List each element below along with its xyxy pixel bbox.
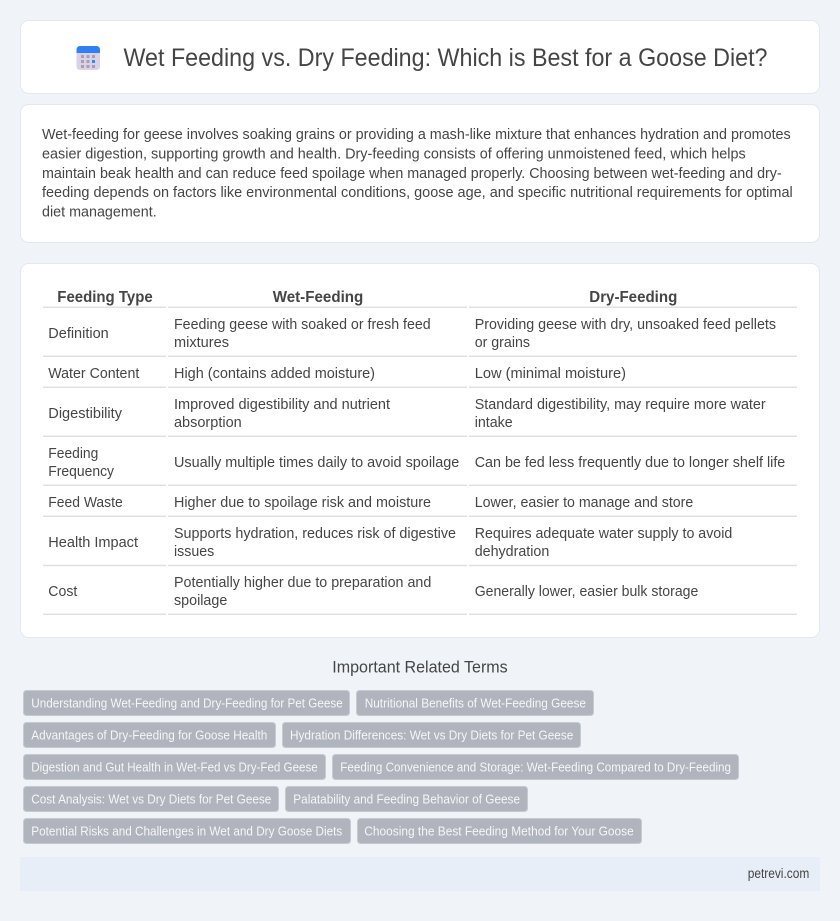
row: water content: High (contains added moisture) (174, 366, 375, 382)
row: cost: Potentially higher due to preparation and (174, 575, 431, 591)
row: definition: Providing geese with dry, unsoaked feed pellets (475, 317, 776, 333)
tag: Potential Risks and Challenges in Wet and Dry Goose Diets (31, 824, 342, 838)
tag (24, 722, 276, 748)
row: definition: Feeding geese with soaked or fresh feed (174, 317, 431, 333)
row: water content (43, 366, 797, 388)
row: definition: or grains (475, 335, 530, 351)
row: cost (43, 575, 797, 615)
header panel (20, 20, 820, 94)
tag: Choosing the Best Feeding Method for Your Goose (364, 824, 634, 838)
heading: important related terms: Important Related Terms (332, 659, 508, 677)
row: feeding frequency: Can be fed less frequently due to longer shelf life (475, 455, 785, 471)
related terms tags (24, 690, 738, 844)
row: health impact: issues (174, 544, 214, 560)
tag (24, 818, 350, 844)
table header row: Wet-Feeding (273, 289, 363, 306)
tag: Palatability and Feeding Behavior of Geese (293, 792, 520, 806)
tag: Advantages of Dry-Feeding for Goose Health (31, 728, 267, 742)
row: health impact: Requires adequate water supply to avoid (475, 526, 732, 542)
tag: Feeding Convenience and Storage: Wet-Feeding Compared to Dry-Feeding (340, 760, 731, 774)
row: definition: mixtures (174, 335, 229, 351)
row: cost: Cost (48, 584, 77, 600)
row: definition: Definition (48, 326, 109, 342)
row: digestibility: intake (475, 415, 513, 431)
tag (356, 690, 594, 716)
row: digestibility: absorption (174, 415, 242, 431)
tag: Cost Analysis: Wet vs Dry Diets for Pet Geese (31, 792, 271, 806)
row: digestibility: Standard digestibility, may require more water (475, 397, 766, 413)
intro paragraph: diet management. (42, 204, 157, 220)
row: feeding frequency: Feeding (48, 446, 98, 462)
tag (24, 786, 278, 812)
icon: calendar (76, 46, 100, 70)
row: feeding frequency: Usually multiple times daily to avoid spoilage (174, 455, 459, 471)
table header row: Dry-Feeding (589, 289, 677, 306)
tag (24, 754, 326, 780)
row: health impact: Health Impact (48, 535, 138, 551)
row: water content: Low (minimal moisture) (475, 366, 626, 382)
intro paragraph (42, 126, 793, 220)
row: feeding frequency (43, 446, 797, 486)
tag: Digestion and Gut Health in Wet-Fed vs Dry-Fed Geese (31, 760, 318, 774)
row: digestibility: Improved digestibility and nutrient (174, 397, 390, 413)
tag: Nutritional Benefits of Wet-Feeding Geese (365, 696, 586, 710)
title: Wet Feeding vs. Dry Feeding: Which is Best for a Goose Diet? (124, 45, 768, 72)
tag: Hydration Differences: Wet vs Dry Diets for Pet Geese (290, 728, 573, 742)
tag (286, 786, 528, 812)
footer (20, 857, 820, 891)
panel: introduction text (20, 104, 820, 242)
table header row (43, 289, 797, 308)
row: feed waste (43, 495, 797, 517)
tag: Understanding Wet-Feeding and Dry-Feeding for Pet Geese (31, 696, 343, 710)
row: cost: Generally lower, easier bulk storage (475, 584, 698, 600)
row: water content: Water Content (48, 366, 139, 382)
row: digestibility: Digestibility (48, 406, 123, 422)
row: health impact: Supports hydration, reduces risk of digestive (174, 526, 456, 542)
row: feed waste: Lower, easier to manage and store (475, 495, 693, 511)
table header row: Feeding Type (57, 289, 153, 306)
tag (24, 690, 350, 716)
panel: comparison table (20, 264, 820, 638)
row: feeding frequency: Frequency (48, 464, 115, 480)
intro paragraph: feeding depends on factors like environmental conditions, goose age, and specific nutritional requirements for optimal (42, 184, 793, 201)
row: cost: spoilage (174, 593, 227, 609)
intro paragraph: easier digestion, supporting growth and health. Dry-feeding consists of offering unmoistened feed, which helps (42, 146, 746, 162)
row: health impact (43, 526, 797, 566)
tag (282, 722, 580, 748)
intro paragraph: Wet-feeding for geese involves soaking grains or providing a mash-like mixture that enhances hydration and promotes (42, 126, 791, 143)
tag (358, 818, 642, 844)
row: digestibility (43, 397, 797, 437)
tag (332, 754, 738, 780)
row: feed waste: Feed Waste (48, 495, 123, 511)
footer site name: petrevi.com (748, 866, 809, 881)
row: definition (43, 317, 797, 357)
row: feed waste: Higher due to spoilage risk and moisture (174, 495, 431, 511)
row: health impact: dehydration (475, 544, 549, 560)
intro paragraph: maintain beak health and can reduce feed spoilage when managed properly. Choosing between wet-feeding and dry- (42, 165, 782, 182)
